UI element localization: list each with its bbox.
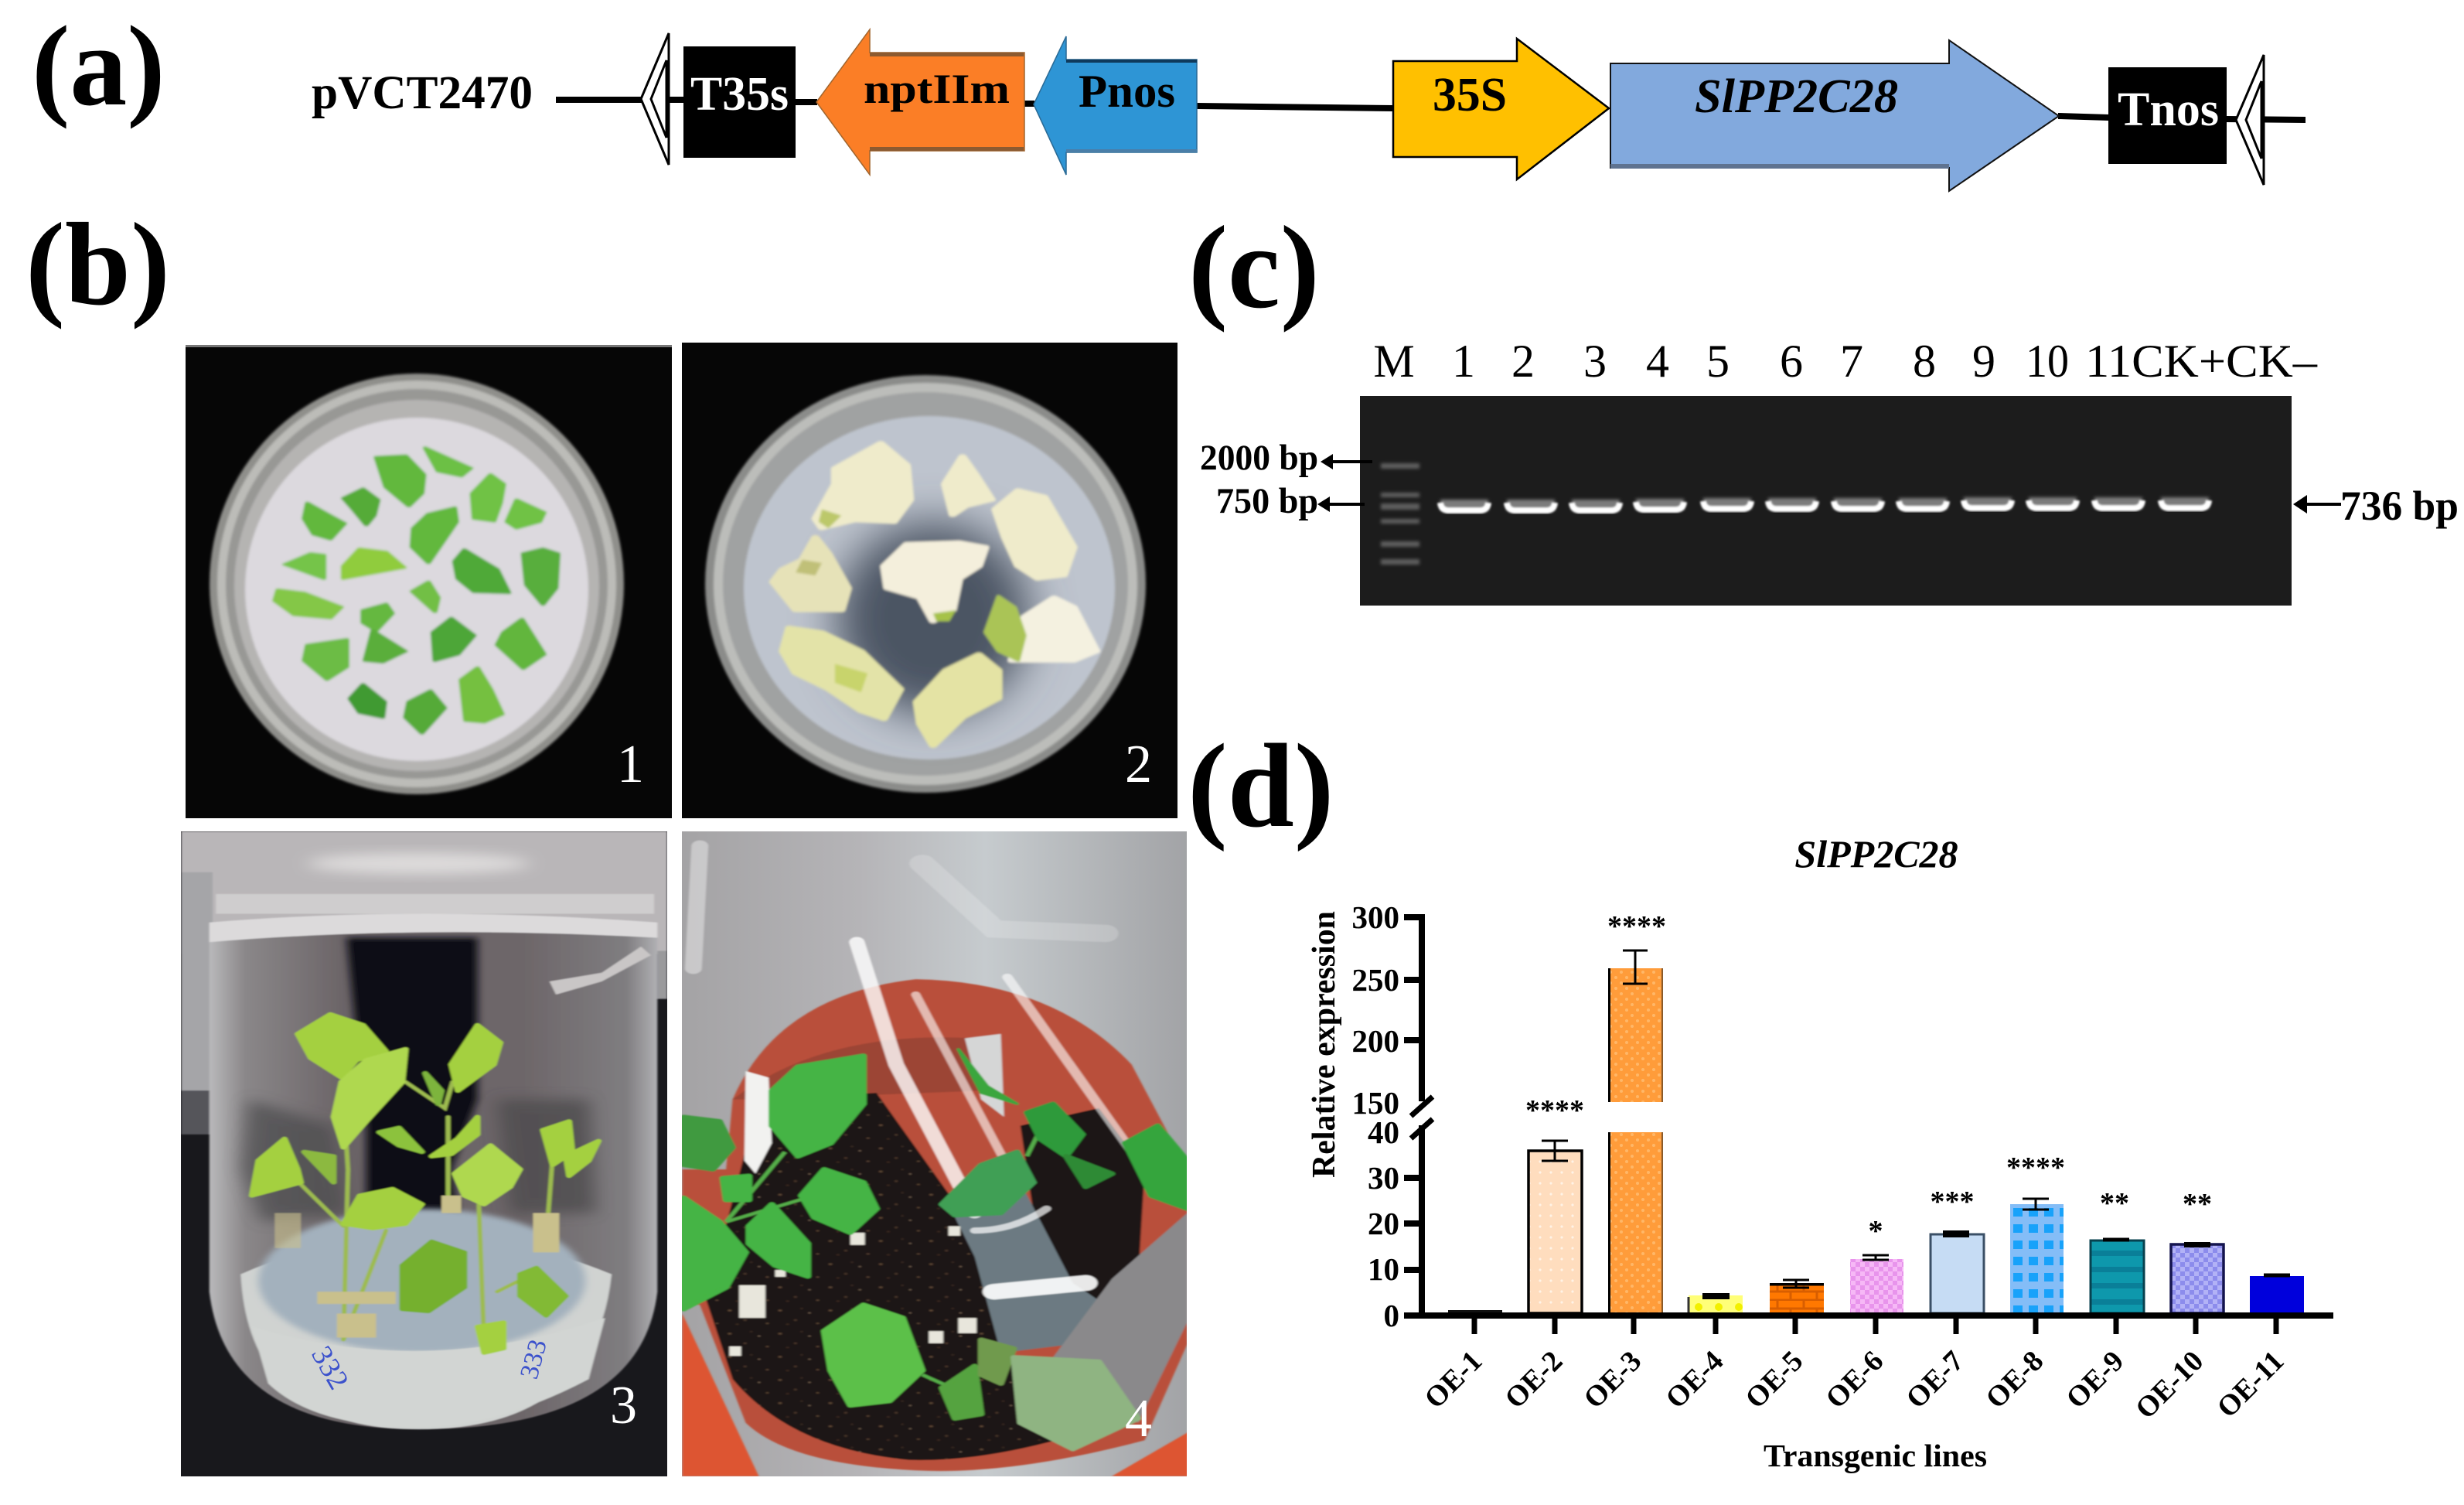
y axis [1404,914,1433,1319]
y axis tick labels: 40 [1368,1114,1399,1150]
lane labels: 11CK+CK– [2085,336,2318,387]
gel image [1360,396,2292,606]
y axis tick labels: 150 [1351,1085,1399,1121]
lane labels: 5 [1706,336,1730,387]
bar OE-4 [1689,1295,1743,1313]
significance stars: *** [1930,1186,1975,1218]
Pnos arrow [1034,36,1197,175]
bar OE-9 [2091,1241,2144,1313]
chart title: SlPP2C28 [1794,832,1958,875]
35S promoter arrow: 35S [1433,69,1507,121]
lane labels: 8 [1913,336,1936,387]
lane labels: M [1373,336,1415,387]
x axis labels: OE-6 [1819,1345,1890,1415]
lane labels: 7 [1840,336,1863,387]
bar OE-2 [1528,1151,1582,1313]
bar OE-6 [1850,1259,1903,1313]
lane labels: 9 [1972,336,1995,387]
photo 1: leaf discs in petri dish [186,345,673,818]
significance stars [1525,910,2212,1247]
T35s terminator: T35s [690,68,789,121]
significance stars: **** [1607,910,1666,943]
bar OE-10 [2171,1244,2224,1313]
x axis labels: OE-1 [1418,1345,1488,1415]
lane labels: 1 [1452,336,1475,387]
y axis tick labels: 30 [1368,1160,1399,1196]
lane labels: 6 [1780,336,1803,387]
x axis labels: OE-2 [1498,1345,1569,1415]
lane labels: 10 [2026,336,2069,387]
significance stars: ** [2183,1188,2212,1220]
significance stars: **** [2006,1152,2065,1184]
y axis tick labels: 20 [1368,1206,1399,1241]
marker label: 2000 bp: 2000 bp [1200,438,1318,478]
photo 2: callus in petri dish [682,343,1182,818]
y axis title: Relative expression [1307,911,1342,1178]
bar OE-8 [2010,1204,2064,1313]
Pnos arrow: Pnos [1079,66,1175,117]
photo 4: plantlets in pot under plastic [682,831,1189,1476]
significance stars: ** [2100,1187,2129,1220]
y axis tick labels: 0 [1384,1298,1399,1333]
x axis labels: OE-5 [1739,1345,1809,1415]
x axis labels: OE-3 [1577,1345,1648,1415]
bar OE-11 [2250,1276,2304,1313]
handwritten jar labels: 332 [305,1341,355,1395]
panel label: (d): (d) [1188,719,1334,852]
panel label: (c): (c) [1188,203,1320,333]
nptIIm arrow [816,29,1024,175]
y axis tick labels: 300 [1351,899,1399,935]
bar OE-5 [1770,1283,1824,1313]
y axis tick labels [1351,899,1399,1333]
panel: bar chart (d) [1307,832,2333,1473]
x axis [1404,1316,2333,1334]
significance stars: * [1868,1215,1883,1247]
x axis labels [1418,1345,2290,1425]
photo 3: regenerated plantlets in jar [181,831,667,1476]
photo number 4: 4 [1125,1389,1152,1449]
x axis labels: OE-8 [1979,1345,2050,1415]
panel: construct map (a) [312,29,2306,191]
icon: left border triangle [641,33,669,165]
plasmid name: pVCT2470 [312,67,533,119]
bars [1448,968,2304,1313]
panel label: (a): (a) [32,3,165,130]
Tnos terminator: Tnos [2118,84,2219,136]
x axis labels: OE-4 [1659,1345,1730,1415]
x axis title: Transgenic lines [1764,1438,1987,1473]
photo 3: regenerated plantlets in jar: 333 [515,1336,553,1382]
x axis labels: OE-7 [1900,1345,1970,1415]
product label: 736 bp: 736 bp [2340,483,2459,529]
SlPP2C28 gene arrow [1610,40,2059,191]
lane labels: 3 [1583,336,1607,387]
lane labels [1373,336,2318,387]
SlPP2C28 gene arrow: SlPP2C28 [1695,70,1898,123]
photo number 1: 1 [617,735,644,794]
nptIIm arrow: nptIIm [864,66,1010,112]
Tnos terminator [2108,67,2227,164]
panel label: (b): (b) [26,200,170,330]
panel: PCR gel (c) [1200,336,2459,606]
significance stars: **** [1525,1094,1584,1127]
x axis labels: OE-10 [2129,1345,2210,1425]
y axis tick labels: 200 [1351,1023,1399,1059]
photo number 3: 3 [610,1376,637,1435]
bar OE-3 [1609,968,1662,1313]
lane labels: 2 [1511,336,1535,387]
icon: right border triangle [2236,55,2264,185]
lane labels: 4 [1646,336,1669,387]
marker label: 750 bp: 750 bp [1216,481,1318,521]
error bars [1542,950,2290,1296]
y axis tick labels: 250 [1351,962,1399,998]
bar OE-1 [1448,1310,1502,1313]
x axis labels: OE-11 [2211,1345,2290,1425]
35S promoter arrow [1393,39,1609,179]
T35s terminator [683,46,796,158]
backbone line [556,97,2306,123]
bar OE-7 [1931,1234,1984,1313]
photo number 2: 2 [1125,735,1152,794]
y axis tick labels: 10 [1368,1251,1399,1287]
x axis labels: OE-9 [2060,1345,2130,1415]
